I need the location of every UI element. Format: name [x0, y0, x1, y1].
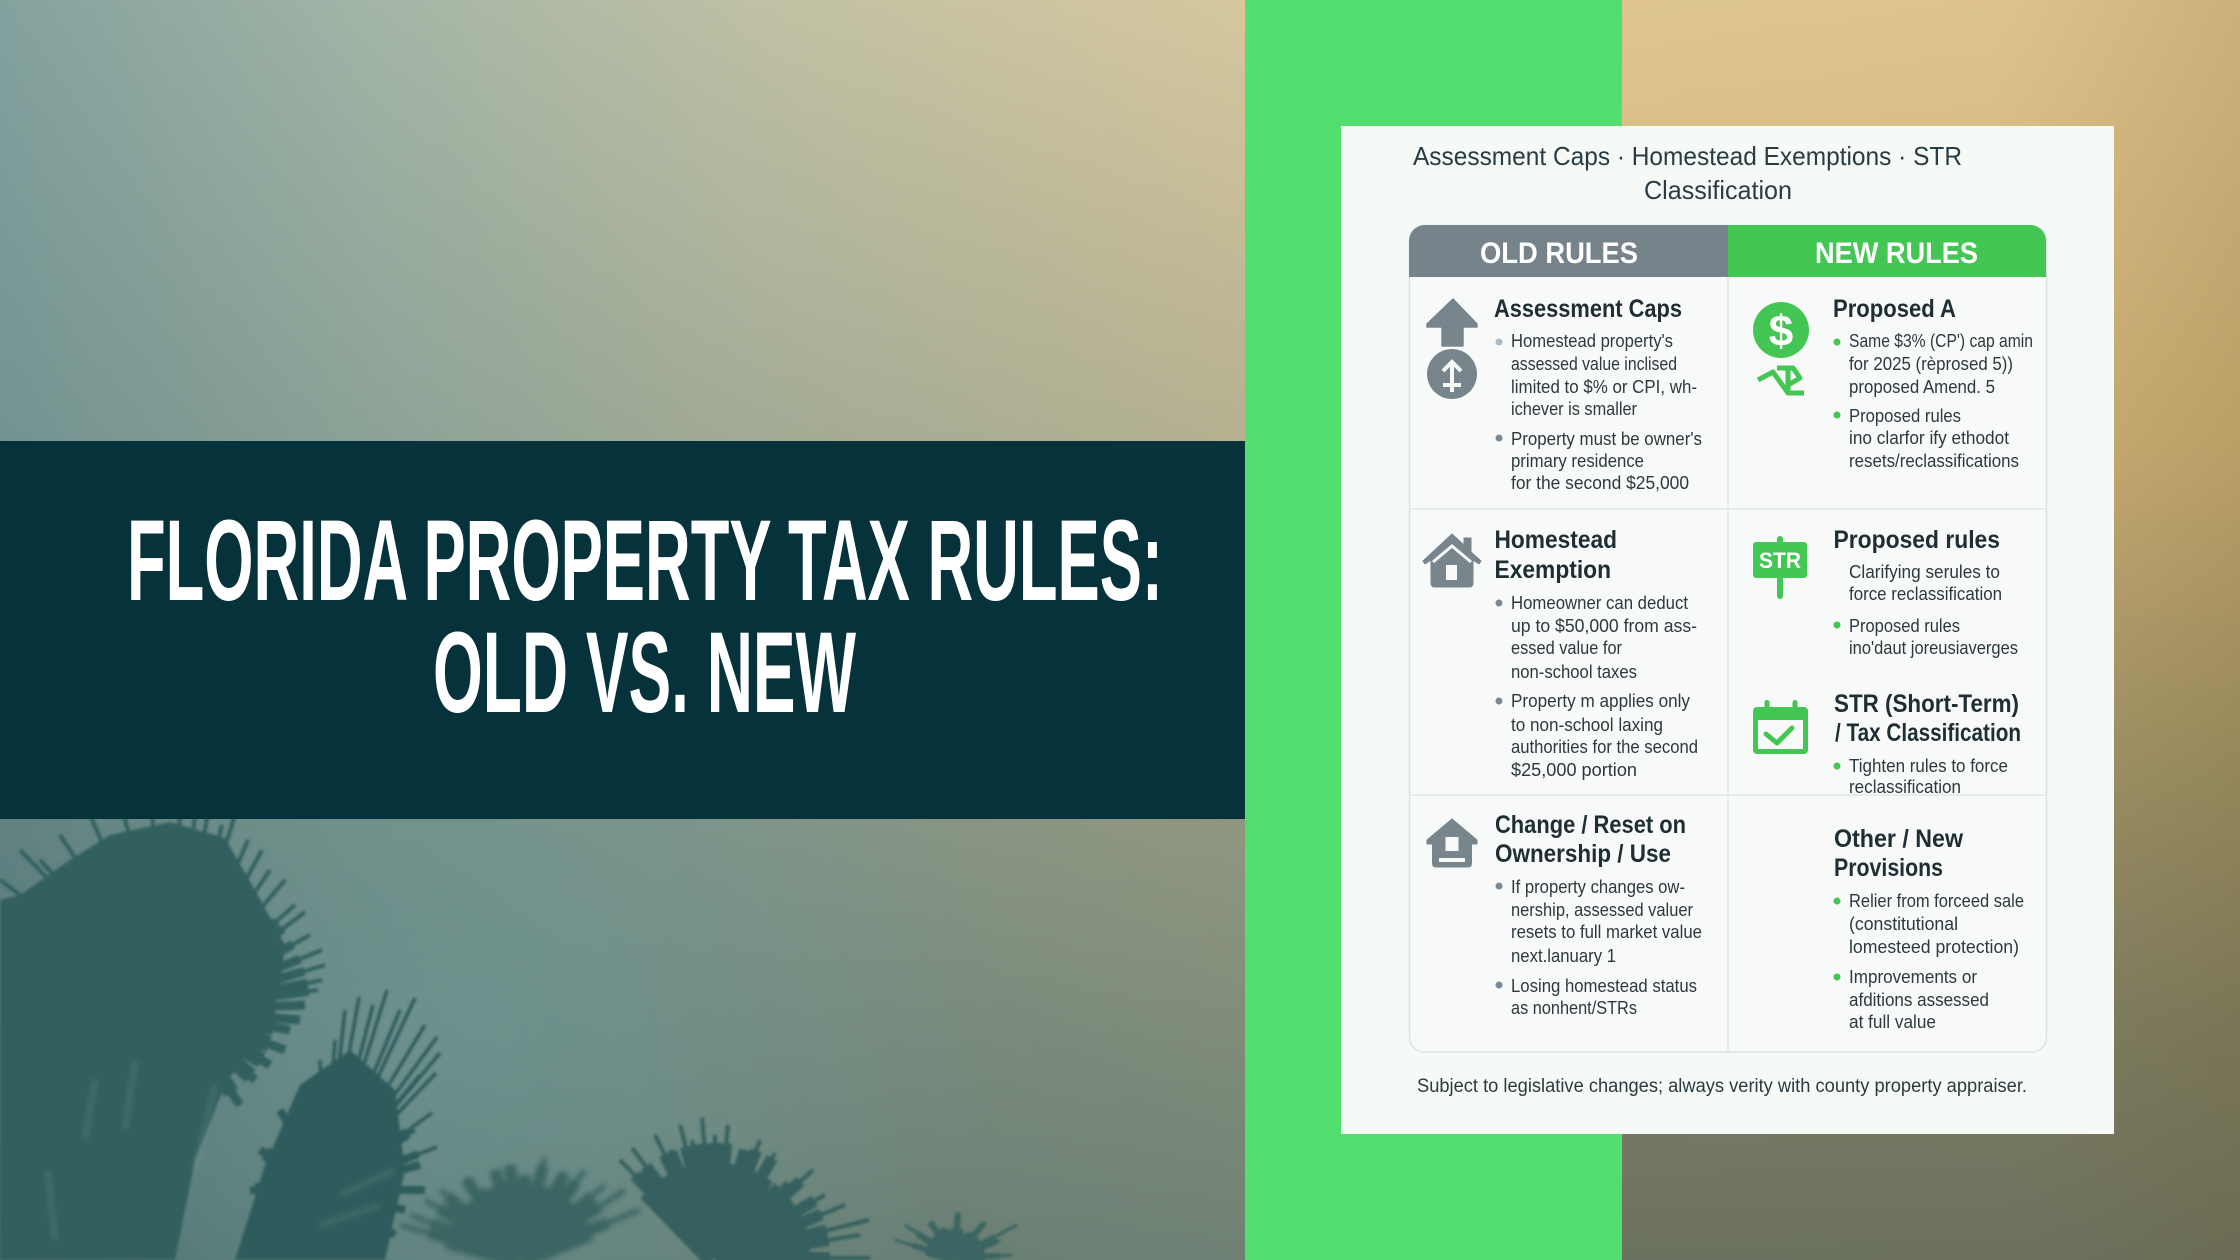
- bullet list: lomesteed protection): [1849, 936, 2019, 957]
- bullet list: Tighten rules to force: [1849, 755, 2008, 776]
- bullet list: (constitutional: [1849, 913, 1958, 934]
- bullet list: resets/reclassifications: [1849, 450, 2019, 471]
- bullet list: [1496, 592, 1698, 780]
- subtitle: Assessment Caps · Homestead Exemptions · STR: [1413, 141, 1962, 171]
- bullet list: ino'daut joreusiaverges: [1849, 637, 2018, 658]
- heading: Exemption: [1494, 556, 1611, 584]
- subtitle: [1413, 141, 1962, 205]
- subtitle: Classification: [1644, 175, 1792, 205]
- column header: new rules: [1728, 225, 2046, 277]
- title: [127, 497, 1163, 737]
- title: FLORIDA PROPERTY TAX RULES:: [127, 497, 1163, 625]
- heading: Assessment Caps: [1494, 295, 1682, 323]
- cell: change / reset: [1427, 811, 1702, 1018]
- bullet list: proposed Amend. 5: [1849, 376, 1995, 397]
- icon: dollar and zigzag: [1753, 302, 1809, 393]
- bullet list: If property changes ow-: [1511, 876, 1685, 897]
- heading: Provisions: [1834, 854, 1943, 882]
- green vertical stripe: [1245, 0, 1622, 1260]
- bullet list: ichever is smaller: [1511, 398, 1637, 419]
- column header: old rules: [1409, 225, 1728, 277]
- bullet list: Proposed rules: [1849, 405, 1961, 426]
- column header: new rules: NEW RULES: [1815, 237, 1978, 270]
- bullet list: Homeowner can deduct: [1511, 592, 1688, 613]
- bullet list: Property m applies only: [1511, 690, 1691, 711]
- background: right sand gradient: [1622, 0, 2240, 1260]
- bullet list: next.lanuary 1: [1511, 945, 1616, 966]
- bullet list: Homestead property's: [1511, 330, 1673, 351]
- column header: old rules: OLD RULES: [1480, 237, 1638, 270]
- cell: assessment caps: [1427, 295, 1702, 493]
- bullet list: Losing homestead status: [1511, 975, 1697, 996]
- cell: STR classification: [1753, 690, 2021, 797]
- icon: house: [1427, 819, 1477, 867]
- heading: [1494, 526, 1617, 584]
- icon: calendar check: [1753, 700, 1808, 754]
- bullet list: Clarifying serules to: [1849, 561, 2000, 582]
- bullet list: for 2025 (rèprosed 5)): [1849, 353, 2013, 374]
- bullet list: [1834, 755, 2008, 797]
- bullet list: afditions assessed: [1849, 989, 1989, 1010]
- bullet list: up to $50,000 from ass-: [1511, 615, 1697, 636]
- bullet list: limited to $% or CPI, wh-: [1511, 376, 1697, 397]
- icon: house with chimney: [1423, 534, 1481, 587]
- bullet list: [1496, 330, 1702, 493]
- bullet list: as nonhent/STRs: [1511, 997, 1637, 1018]
- bullet list: resets to full market value: [1511, 921, 1702, 942]
- icon: STR sign: STR: [1759, 548, 1801, 573]
- heading: Homestead: [1494, 526, 1617, 554]
- background: left sky gradient: [0, 0, 1245, 1260]
- table frame: [1410, 226, 2046, 1052]
- bullet list: Proposed rules: [1849, 615, 1960, 636]
- bullet list: Property must be owner's: [1511, 428, 1702, 449]
- cell: proposed A: [1753, 295, 2033, 471]
- bullet list: assessed value inclised: [1511, 353, 1677, 374]
- bullet list: reclassification: [1849, 776, 1961, 797]
- bullet list: [1834, 561, 2018, 658]
- bullet list: Same $3% (CP') cap amin: [1849, 330, 2033, 351]
- bullet list: at full value: [1849, 1011, 1936, 1032]
- title: OLD VS. NEW: [433, 609, 856, 737]
- cell: homestead exemption: [1423, 526, 1698, 780]
- bullet list: essed value for: [1511, 637, 1622, 658]
- heading: Proposed A: [1833, 295, 1956, 323]
- panel: comparison card: [1341, 126, 2114, 1134]
- bullet list: [1496, 876, 1702, 1018]
- bullet list: for the second $25,000: [1511, 472, 1689, 493]
- bullet list: [1834, 330, 2033, 471]
- bullet list: nership, assessed valuer: [1511, 899, 1693, 920]
- background: palm silhouettes: [0, 800, 1017, 1260]
- bullet list: primary residence: [1511, 450, 1644, 471]
- heading: / Tax Classification: [1835, 719, 2021, 747]
- heading: Other / New: [1834, 825, 1964, 853]
- bullet list: to non-school laxing: [1511, 714, 1663, 735]
- cell: other / new provisions: [1834, 825, 2024, 1032]
- bullet list: Relier from forceed sale: [1849, 890, 2024, 911]
- title band: [0, 441, 1245, 819]
- bullet list: $25,000 portion: [1511, 759, 1637, 780]
- cell: proposed rules: [1753, 526, 2018, 658]
- bullet list: ino clarfor ify ethodot: [1849, 427, 2009, 448]
- bullet list: Improvements or: [1849, 966, 1977, 987]
- heading: [1834, 690, 2021, 747]
- heading: Proposed rules: [1834, 526, 2000, 554]
- icon: up arrow and circle: [1427, 299, 1477, 399]
- heading: [1495, 811, 1686, 868]
- bullet list: force reclassification: [1849, 583, 2002, 604]
- heading: STR (Short-Term): [1834, 690, 2019, 718]
- bullet list: non-school taxes: [1511, 661, 1637, 682]
- heading: Change / Reset on: [1495, 811, 1686, 839]
- bullet list: authorities for the second: [1511, 736, 1698, 757]
- heading: Ownership / Use: [1495, 840, 1671, 868]
- bullet list: [1834, 890, 2024, 1032]
- footer note: Subject to legislative changes; always verity with county property appraiser.: [1417, 1076, 2027, 1097]
- icon: STR sign: [1753, 536, 1807, 599]
- icon: dollar and zigzag: $: [1769, 307, 1793, 356]
- heading: [1834, 825, 1964, 882]
